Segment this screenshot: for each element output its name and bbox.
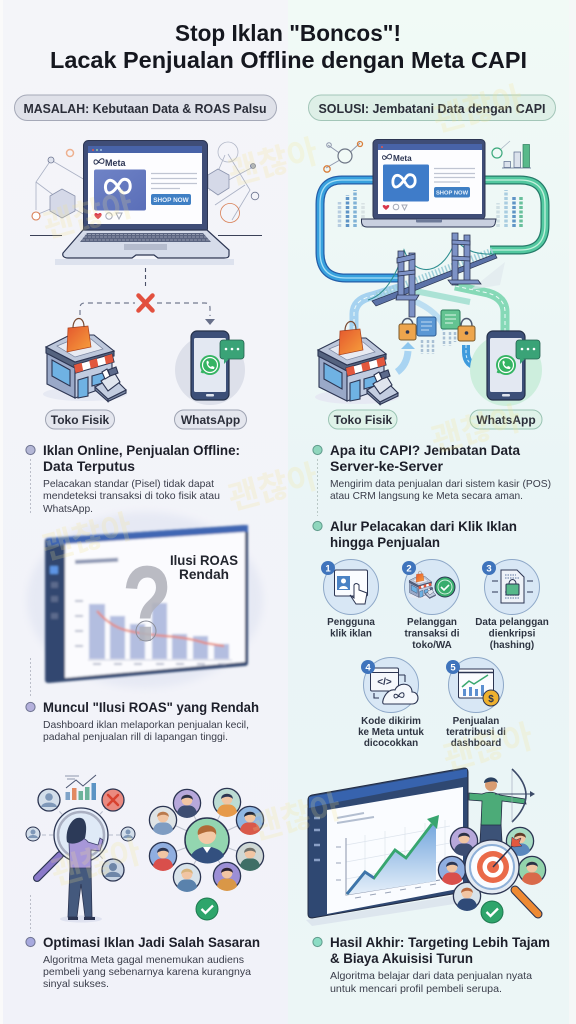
illustration: blurred ROAS dashboard (27, 512, 263, 688)
bullet (26, 702, 35, 712)
step 5: penjualan teratribusi (446, 658, 506, 749)
bullet (313, 445, 322, 455)
step 5: penjualan teratribusi: $ (488, 694, 494, 705)
icon: whatsapp phone left (175, 331, 245, 405)
step 2: transaksi toko: transaksi di (405, 628, 460, 640)
label: Toko Fisik right (328, 410, 397, 429)
chart: left data equalizer (340, 190, 363, 227)
bullet (26, 445, 35, 455)
title (50, 20, 527, 73)
step 4: kode dikirim ke Meta: </> (377, 677, 392, 688)
avatar: central buyer (185, 818, 229, 863)
label: Ilusi ROAS Rendah (170, 552, 238, 582)
illustration: network nodes behind left laptop (32, 142, 259, 222)
icon: locks and encrypted documents (399, 310, 475, 354)
watermarks (38, 79, 537, 892)
watermarks: 괜찮아 (427, 399, 525, 459)
panel: solution column background (288, 0, 576, 1024)
step 2: transaksi toko: toko/WA (412, 640, 452, 651)
text block: ilusi ROAS: padahal penjualan rill di lapangan tinggi. (43, 732, 228, 743)
heading: masalah pill: MASALAH: Kebutaan Data & ROAS Palsu (24, 101, 266, 116)
step 5: penjualan teratribusi: teratribusi di (446, 727, 506, 738)
icon: blue arrow into phone (466, 345, 493, 374)
text block: hasil akhir (313, 935, 550, 995)
watermarks: 괜찮아 (39, 185, 137, 245)
step 4: kode dikirim ke Meta: Kode dikirim (361, 716, 421, 727)
bullet (313, 937, 322, 947)
step 3: data dienkripsi: Data pelanggan (475, 617, 549, 628)
title: Stop Iklan "Boncos"! (175, 20, 401, 46)
label: WhatsApp right (470, 410, 542, 429)
icon: target magnifier with audience (438, 827, 546, 923)
text block: ilusi ROAS: Muncul "Ilusi ROAS" yang Rendah (43, 700, 259, 716)
text block: alur pelacakan heading (313, 519, 517, 551)
illustration: data loop tube (320, 180, 545, 278)
text block: salah sasaran: Optimasi Iklan Jadi Salah Sasaran (43, 935, 260, 951)
step 4: kode dikirim ke Meta: 4 (365, 662, 371, 674)
text block: alur pelacakan heading: hingga Penjualan (330, 535, 440, 551)
panel: problem column background (0, 0, 289, 1024)
text block: apa itu CAPI: Apa itu CAPI? Jembatan Data (330, 443, 520, 459)
icon: physical store right (315, 321, 399, 404)
illustration: data roads to bridge (354, 286, 505, 332)
text block: alur pelacakan heading: Alur Pelacakan dari Klik Iklan (330, 519, 517, 535)
label: WhatsApp left: WhatsApp (181, 413, 240, 427)
text block: apa itu CAPI (313, 443, 551, 516)
step 5: penjualan teratribusi: 5 (450, 662, 456, 674)
illustration: rising sales dashboard (306, 768, 480, 926)
chart: right data equalizer (498, 190, 521, 227)
watermarks: 괜찮아 (38, 507, 136, 567)
step 1: pengguna klik iklan: 1 (325, 564, 331, 574)
step 4: kode dikirim ke Meta: ke Meta untuk (358, 727, 424, 738)
illustration: right laptop with Meta ad: SHOP NOW (436, 190, 469, 196)
illustration: left laptop with Meta ad: Meta (105, 158, 126, 168)
text block: data terputus (26, 443, 240, 515)
label: Toko Fisik right: Toko Fisik (334, 413, 393, 427)
step 1: pengguna klik iklan: Pengguna (327, 617, 375, 628)
illustration: left laptop with Meta ad (55, 140, 234, 265)
step 5: penjualan teratribusi: dashboard (451, 738, 501, 749)
illustration: audience avatar cluster (149, 788, 264, 920)
figure: archer (469, 769, 535, 842)
icon: small network right (324, 142, 362, 172)
step 4: kode dikirim ke Meta (358, 658, 424, 749)
title: Lacak Penjualan Offline dengan Meta CAPI (50, 47, 527, 73)
bullet (313, 521, 322, 531)
text block: apa itu CAPI: Mengirim data penjualan dari sistem kasir (POS) (330, 479, 551, 490)
label: Toko Fisik left: Toko Fisik (51, 413, 110, 427)
text block: data terputus: Data Terputus (43, 459, 135, 475)
icon: blue arrow from store (397, 342, 415, 372)
heading: solusi pill: SOLUSI: Jembatani Data dengan CAPI (318, 101, 546, 116)
label: Ilusi ROAS Rendah: Ilusi ROAS (170, 552, 238, 568)
step 3: data dienkripsi: (hashing) (490, 640, 534, 651)
step 3: data dienkripsi (475, 560, 549, 651)
heading: solusi pill (308, 95, 556, 120)
text block: salah sasaran: sinyal sukses. (43, 979, 109, 990)
icon: whatsapp phone right (470, 331, 542, 406)
step 4: kode dikirim ke Meta: dicocokkan (364, 738, 418, 749)
illustration: wrong targeting magnifier (26, 775, 135, 922)
step 1: pengguna klik iklan: klik iklan (330, 628, 372, 640)
heading: masalah pill (14, 95, 276, 120)
icon: small growth bars (492, 141, 531, 168)
text block: data terputus: Iklan Online, Penjualan Offline: (43, 443, 240, 459)
divider line under left laptop (30, 234, 262, 236)
text block: salah sasaran: Algoritma Meta gagal menemukan audiens (43, 955, 244, 966)
icon: green check (481, 901, 503, 923)
illustration: right laptop with Meta ad: Meta (393, 154, 412, 163)
step 2: transaksi toko (402, 560, 460, 651)
watermarks: 괜찮아 (224, 457, 322, 517)
bullet (26, 937, 35, 947)
step 5: penjualan teratribusi: Penjualan (453, 716, 499, 727)
watermarks: 괜찮아 (247, 787, 345, 847)
watermarks: 괜찮아 (224, 132, 322, 192)
label: Toko Fisik left (46, 410, 114, 429)
text block: apa itu CAPI: atau CRM langsung ke Meta secara aman. (330, 491, 523, 502)
illustration: left laptop with Meta ad: SHOP NOW (153, 197, 190, 204)
text block: salah sasaran: pembeli yang sebenarnya karena kurangnya (43, 967, 251, 978)
label: WhatsApp right: WhatsApp (476, 413, 536, 427)
text block: hasil akhir: & Biaya Akuisisi Turun (330, 951, 473, 967)
icon: mini bar chart (65, 775, 96, 800)
text block: ilusi ROAS (26, 658, 259, 743)
icon: red cross (138, 296, 152, 310)
illustration: suspension bridge (368, 233, 505, 317)
icon: question mark: ? (122, 543, 172, 664)
arrow: broken tracking connection (80, 268, 215, 325)
figure: person analysing (67, 818, 103, 920)
text block: data terputus: Pelacakan standar (Pisel) tidak dapat (43, 479, 214, 490)
text block: data terputus: WhatsApp. (43, 504, 93, 515)
text block: hasil akhir: Hasil Akhir: Targeting Lebih Tajam (330, 935, 550, 951)
watermarks: 괜찮아 (429, 79, 527, 139)
watermarks: 괜찮아 (439, 717, 537, 777)
label: WhatsApp left (174, 410, 246, 429)
text block: ilusi ROAS: Dashboard iklan melaporkan penjualan kecil, (43, 720, 249, 731)
label: Ilusi ROAS Rendah: Rendah (179, 566, 229, 582)
text block: hasil akhir: untuk mencari profil pembeli serupa. (330, 984, 502, 995)
step 3: data dienkripsi: 3 (486, 564, 492, 574)
watermarks: 괜찮아 (47, 832, 145, 892)
icon: physical store left (43, 318, 127, 402)
step 1: pengguna klik iklan (321, 560, 378, 640)
text block: hasil akhir: Algoritma belajar dari data penjualan nyata (330, 971, 532, 982)
text block: apa itu CAPI: Server-ke-Server (330, 459, 443, 475)
text block: data terputus: mendeteksi transaksi di toko fisik atau (43, 491, 220, 502)
text block: salah sasaran (26, 895, 260, 990)
illustration: right laptop with Meta ad (362, 140, 496, 227)
icon: green check (196, 898, 218, 920)
icon: red rejected node (102, 789, 124, 811)
step 3: data dienkripsi: dienkripsi (489, 628, 536, 640)
step 2: transaksi toko: 2 (406, 564, 412, 574)
step 2: transaksi toko: Pelanggan (407, 617, 457, 628)
